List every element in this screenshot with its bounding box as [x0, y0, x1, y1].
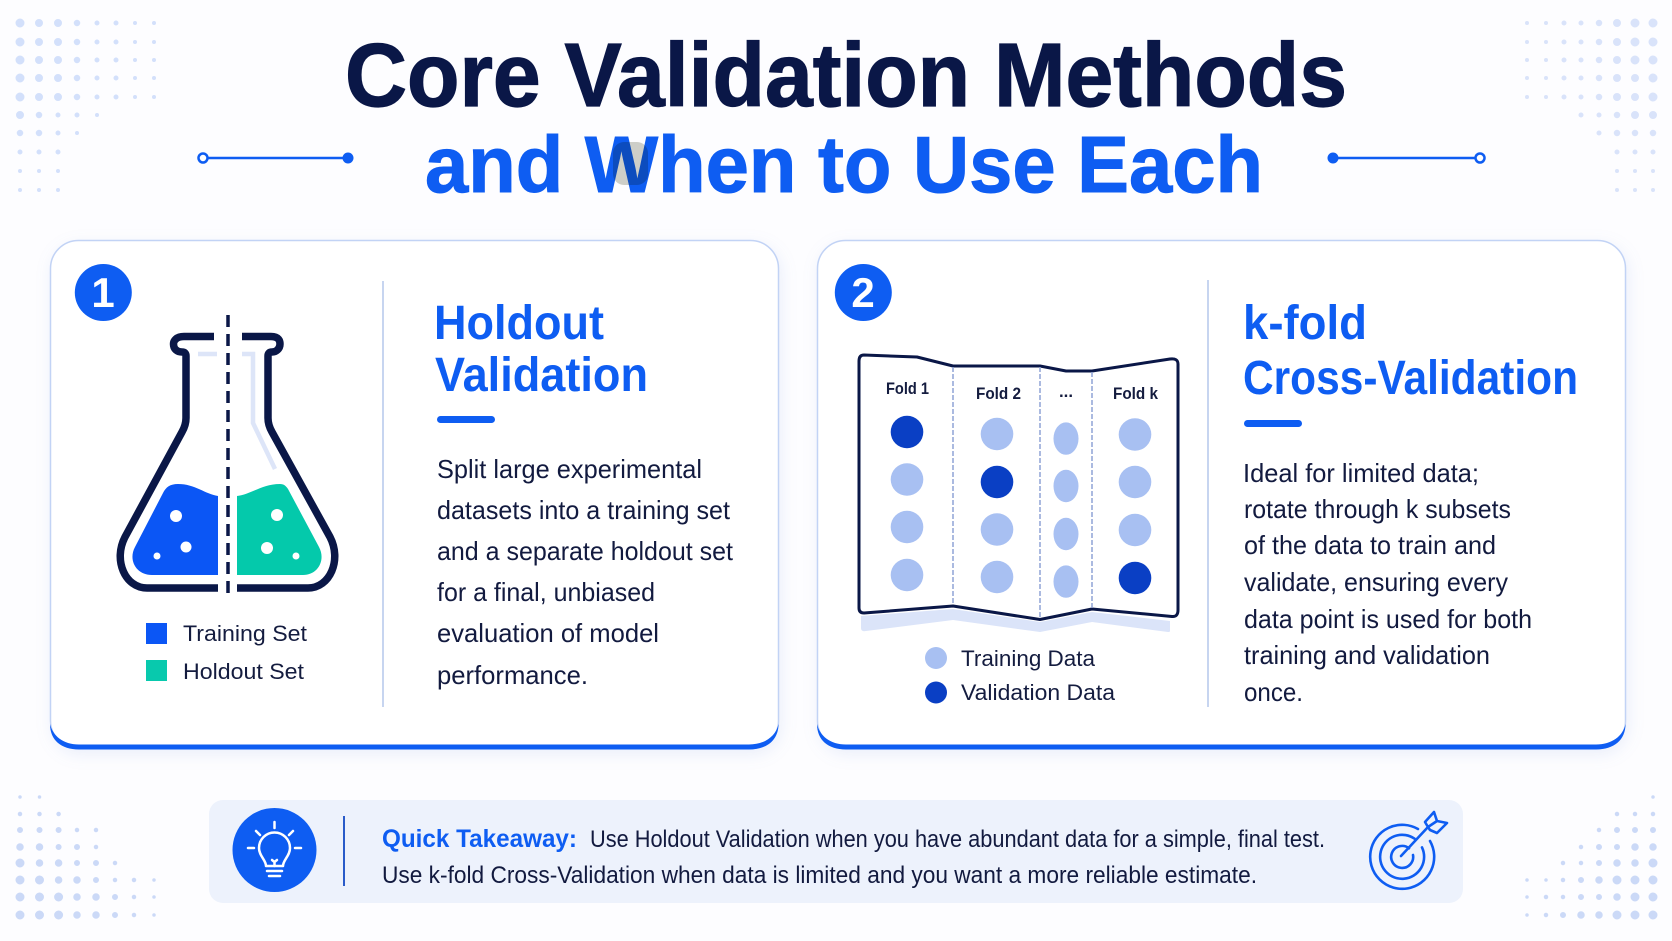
takeaway text — [382, 825, 1325, 889]
callout: quick takeaway — [209, 800, 1463, 903]
heading: holdout validation — [434, 297, 648, 402]
heading underline — [437, 416, 495, 423]
legend: training and holdout set: Holdout Set — [183, 659, 304, 684]
icon: folded sheet with k folds: Fold 1 — [886, 379, 929, 398]
holdout description: performance. — [437, 660, 588, 690]
heading: k-fold cross-validation: k-fold — [1243, 297, 1367, 350]
holdout description — [437, 454, 734, 690]
holdout description: Split large experimental — [437, 454, 702, 484]
heading underline — [1244, 420, 1302, 427]
icon: target with arrow — [1370, 812, 1447, 889]
panel divider — [1207, 280, 1209, 707]
legend: training and holdout set — [146, 621, 307, 684]
icon: folded sheet with k folds — [859, 355, 1178, 632]
k-fold description: validate, ensuring every — [1244, 567, 1508, 597]
heading: k-fold cross-validation — [1243, 297, 1578, 405]
k-fold description: training and validation — [1244, 640, 1490, 670]
card bottom accent — [50, 724, 778, 750]
panel divider — [382, 281, 384, 707]
heading: holdout validation: Validation — [435, 349, 648, 402]
card bottom accent — [817, 724, 1626, 750]
holdout description: evaluation of model — [437, 618, 659, 648]
decorative dots top right — [1527, 23, 1653, 190]
panel: holdout validation — [50, 240, 778, 750]
title line 1: Core Validation Methods — [345, 26, 1347, 126]
icon: folded sheet with k folds: ... — [1059, 382, 1073, 401]
holdout description: datasets into a training set — [437, 495, 731, 525]
legend: training and validation data — [925, 646, 1116, 705]
title ornament left — [198, 152, 354, 164]
decorative dots bottom left — [20, 797, 154, 915]
decorative dots top left — [20, 23, 154, 190]
takeaway text: Quick Takeaway: — [382, 825, 577, 853]
k-fold description: once. — [1244, 677, 1303, 707]
k-fold description: of the data to train and — [1244, 530, 1496, 560]
card background — [818, 240, 1626, 748]
number badge 1 — [75, 264, 132, 321]
panel: k-fold cross-validation — [817, 240, 1626, 750]
holdout description: and a separate holdout set — [437, 536, 734, 566]
icon: folded sheet with k folds: Fold k — [1113, 384, 1158, 403]
icon: flask split into training and holdout — [120, 315, 335, 599]
card background — [50, 240, 778, 748]
number badge 1: 1 — [91, 269, 115, 316]
k-fold description: Ideal for limited data; — [1243, 458, 1479, 488]
legend: training and validation data: Training Data — [961, 646, 1096, 671]
k-fold description: data point is used for both — [1244, 604, 1532, 634]
callout divider — [343, 816, 345, 886]
legend: training and holdout set: Training Set — [183, 621, 307, 646]
callout background — [209, 800, 1463, 903]
smudge on W — [613, 142, 648, 185]
k-fold description — [1243, 458, 1532, 707]
takeaway text: Use Holdout Validation when you have abundant data for a simple, final test. — [590, 826, 1325, 853]
number badge 2 — [835, 264, 892, 321]
heading: k-fold cross-validation: Cross-Validation — [1243, 352, 1578, 405]
title — [345, 26, 1347, 209]
k-fold description: rotate through k subsets — [1244, 494, 1511, 524]
title ornament right — [1328, 152, 1484, 164]
takeaway text: Use k-fold Cross-Validation when data is limited and you want a more reliable estimate. — [382, 862, 1257, 889]
title line 2: and When to Use Each — [425, 120, 1263, 209]
icon: light bulb — [232, 808, 316, 892]
legend: training and validation data: Validation Data — [961, 680, 1116, 705]
holdout description: for a final, unbiased — [437, 577, 655, 607]
icon: folded sheet with k folds: Fold 2 — [976, 384, 1021, 403]
heading: holdout validation: Holdout — [434, 297, 604, 350]
decorative dots bottom right — [1527, 797, 1653, 915]
number badge 2: 2 — [851, 269, 875, 316]
